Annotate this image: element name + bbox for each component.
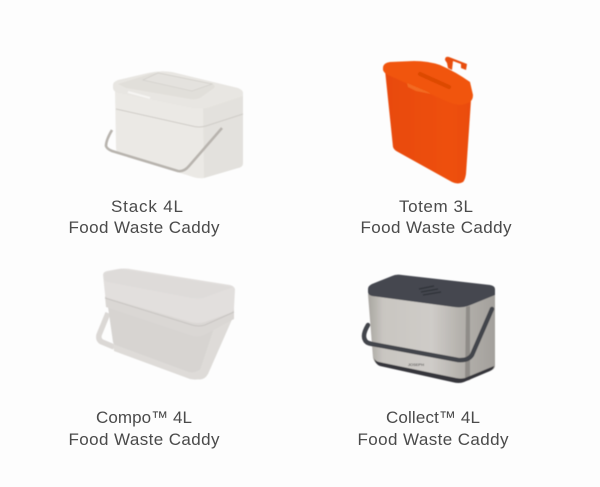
body	[115, 90, 243, 178]
label: Totem: Totem 3L	[399, 197, 473, 216]
lid	[368, 275, 495, 307]
bin	[107, 300, 222, 378]
lid	[383, 61, 473, 105]
lid vents	[419, 286, 441, 295]
rim	[105, 296, 234, 336]
lid top face	[104, 269, 233, 298]
lid clip	[128, 92, 150, 98]
front corner shadow	[465, 306, 470, 381]
hook	[445, 57, 467, 70]
lid tab	[407, 83, 431, 94]
base band	[374, 358, 494, 383]
lid panel	[118, 73, 215, 99]
logo: JOSEPH	[408, 362, 424, 367]
body	[385, 70, 471, 184]
product: Stack 4L caddy	[106, 71, 243, 178]
handle	[106, 128, 222, 171]
label: Stack: Stack 4L	[111, 197, 183, 216]
lid seam	[116, 109, 243, 127]
label: Collect: Collect™ 4L	[386, 408, 480, 427]
label: Totem: Food Waste Caddy	[360, 218, 512, 237]
label: Collect	[358, 408, 509, 449]
handle	[364, 309, 492, 360]
side shading	[203, 93, 243, 178]
label: Compo: Food Waste Caddy	[68, 430, 220, 449]
label: Stack: Food Waste Caddy	[68, 218, 220, 237]
lid	[103, 268, 235, 323]
label: Stack	[68, 197, 220, 237]
body	[368, 292, 495, 382]
label: Collect: Food Waste Caddy	[358, 430, 509, 449]
product: Compo 4L caddy	[99, 268, 235, 380]
label: Compo	[68, 408, 220, 449]
label: Totem	[360, 197, 512, 237]
lid front seam	[105, 298, 234, 326]
front handle bar	[113, 344, 208, 380]
lid grip	[420, 74, 449, 87]
product: Totem 3L caddy	[383, 57, 473, 183]
product: Collect 4L caddy	[364, 275, 495, 383]
handle wedge	[197, 315, 234, 379]
label: Compo: Compo™ 4L	[96, 408, 192, 427]
lid	[113, 71, 243, 108]
handle back	[99, 313, 114, 347]
